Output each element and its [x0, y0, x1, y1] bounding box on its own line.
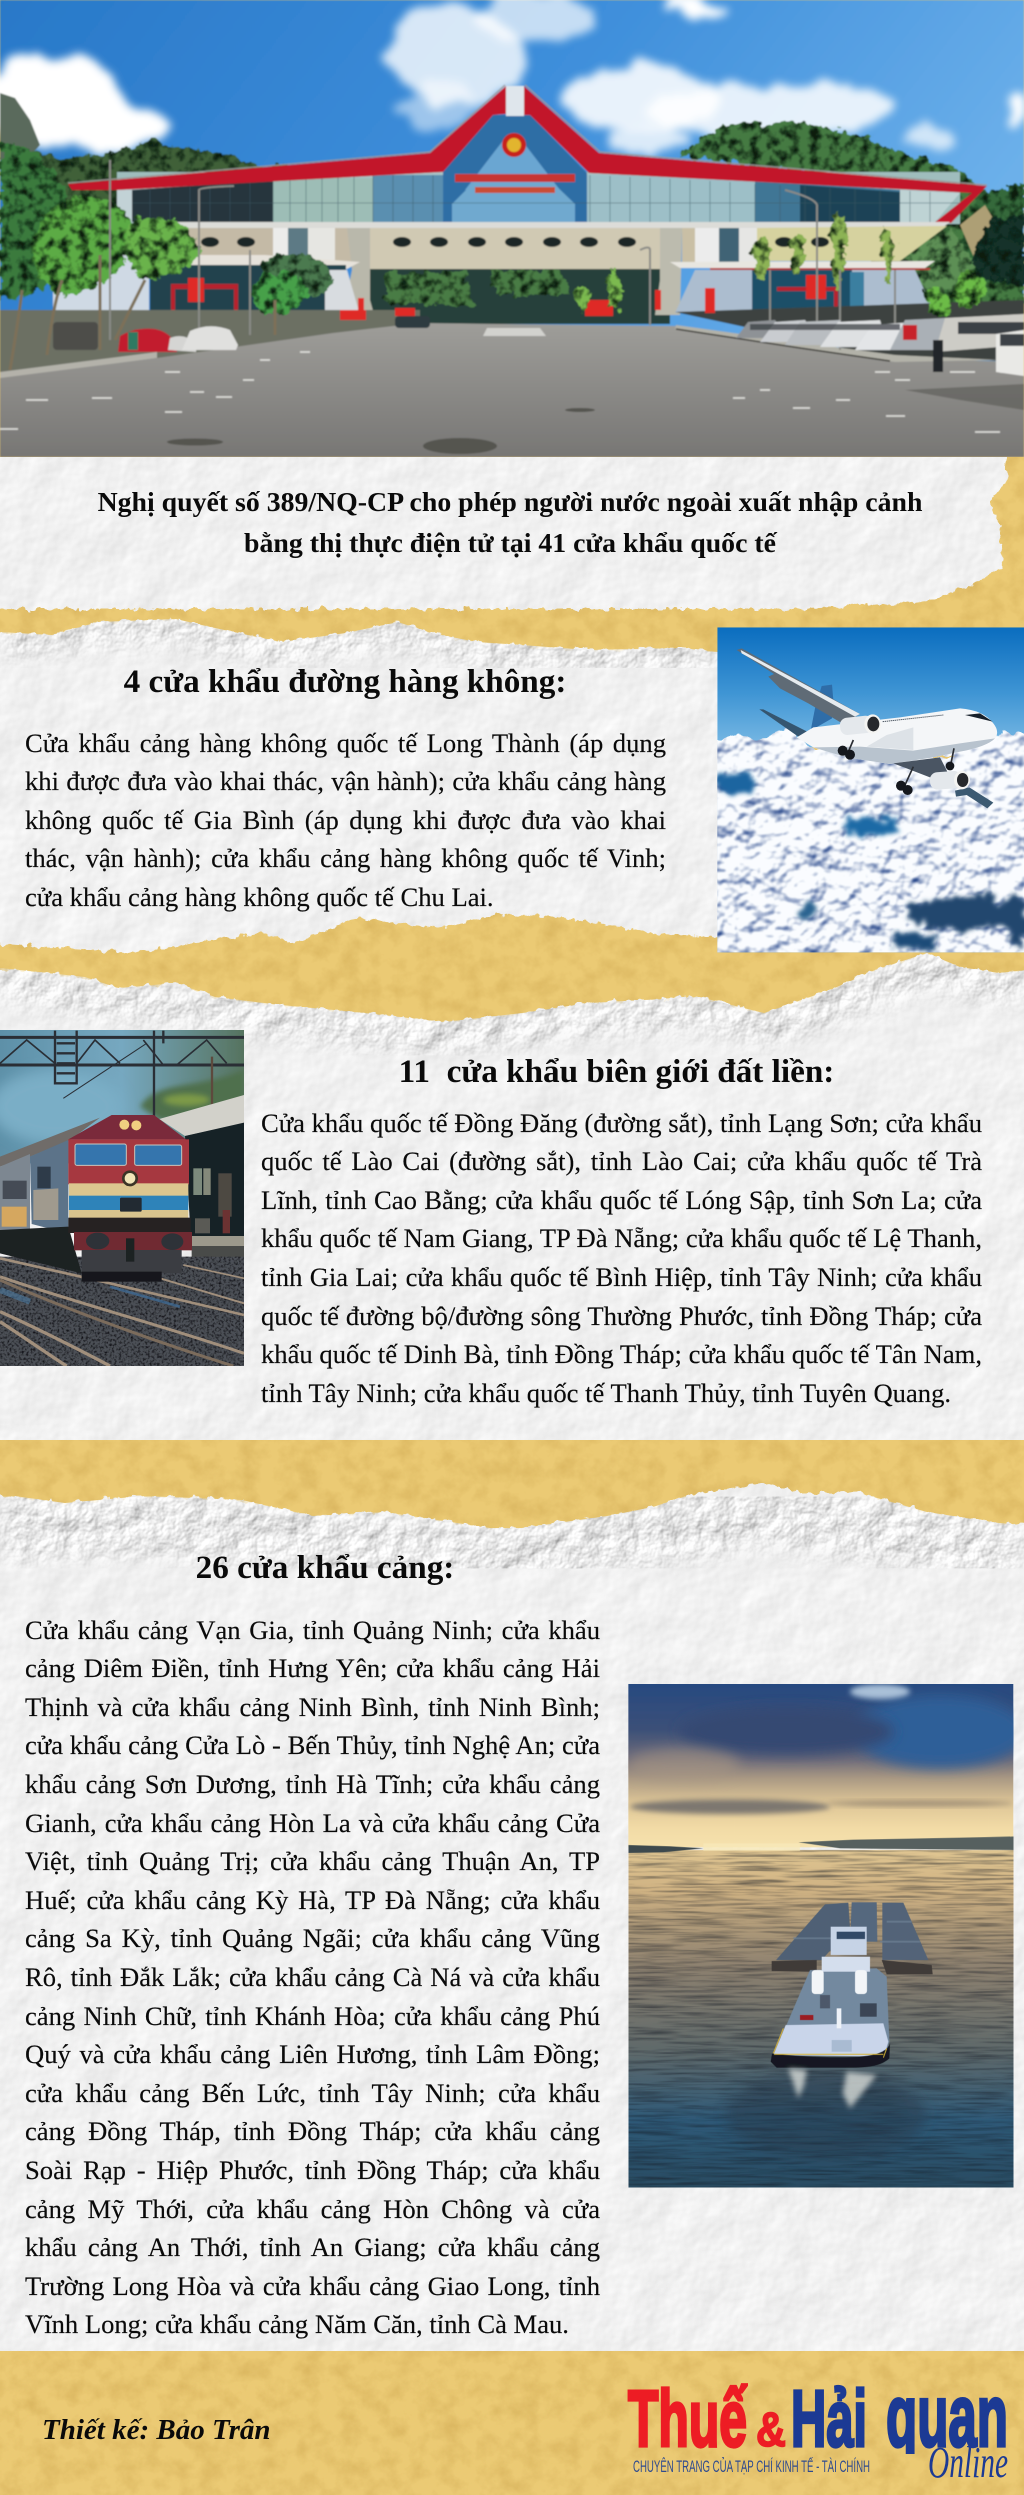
- title text: [98, 486, 922, 558]
- body text: port gates: cảng Ninh Chữ, tỉnh Khánh Hòa; cửa khẩu cảng Phú: [25, 2001, 600, 2031]
- logo: Thuế & Hải quan Online: [628, 2374, 1008, 2487]
- body text: air gates: cửa khẩu cảng hàng không quốc tế Chu Lai.: [25, 882, 494, 912]
- body text: port gates: khẩu cảng Sơn Dương, tỉnh Hà Tĩnh; cửa khẩu cảng: [25, 1769, 600, 1799]
- title text: Nghị quyết số 389/NQ-CP cho phép người nước ngoài xuất nhập cảnh: [98, 486, 922, 518]
- torn paper sheet: [0, 1484, 1024, 2370]
- logo: Thuế & Hải quan Online: Hải: [791, 2374, 867, 2463]
- tug: [773, 1968, 889, 2057]
- designer credit: Thiết kế: Bảo Trân: [42, 2414, 271, 2446]
- plane: [737, 648, 997, 808]
- body text: air gates: khi được đưa vào khai thác, vận hành); cửa khẩu cảng hàng: [25, 766, 666, 796]
- torn paper sheet: [0, 619, 730, 953]
- body text: port gates: cảng Mỹ Thới, cửa khẩu cảng Hòn Chông và cửa: [25, 2194, 600, 2224]
- body text: land gates: tỉnh Gia Lai; cửa khẩu quốc tế Bình Hiệp, tỉnh Tây Ninh; cửa khẩu: [261, 1262, 982, 1292]
- wake: [788, 2068, 877, 2108]
- torn paper sheet: [0, 953, 1024, 1460]
- body text: port gates: cửa khẩu cảng Bến Lức, tỉnh Tây Ninh; cửa khẩu: [25, 2078, 600, 2108]
- logo: Thuế & Hải quan Online: Thuế: [628, 2374, 747, 2463]
- photo: barge at sunset: [628, 1684, 1014, 2188]
- body text: land gates: tỉnh Tây Ninh; cửa khẩu quốc tế Thanh Thủy, tỉnh Tuyên Quang.: [261, 1378, 951, 1408]
- body text: port gates: cảng Sa Kỳ, tỉnh Quảng Ngãi; cửa khẩu cảng Vũng: [25, 1923, 600, 1953]
- body text: air gates: không quốc tế Gia Bình (áp dụng khi được đưa vào khai: [25, 805, 666, 835]
- hills: [0, 93, 1024, 310]
- heading: air gates: 4 cửa khẩu đường hàng không:: [124, 663, 566, 700]
- parked cars right: [736, 314, 1024, 376]
- building body: [53, 85, 987, 325]
- emblem: [502, 133, 526, 157]
- barges: [776, 1903, 850, 1960]
- photo: train: [0, 1030, 244, 1366]
- ground: [0, 1257, 244, 1366]
- slab and ceiling: [153, 222, 950, 228]
- back trees through gate: [370, 262, 670, 324]
- footer band: [42, 2374, 1008, 2487]
- torn paper sheet: [0, 445, 1007, 609]
- body text: land gates: Cửa khẩu quốc tế Đồng Đăng (đường sắt), tỉnh Lạng Sơn; cửa khẩu: [261, 1108, 982, 1138]
- body text: port gates: Vĩnh Long; cửa khẩu cảng Năm Căn, tỉnh Cà Mau.: [25, 2309, 569, 2339]
- right wing lower storey: [675, 270, 935, 313]
- body text: air gates: Cửa khẩu cảng hàng không quốc tế Long Thành (áp dụng: [25, 728, 666, 758]
- panel: sea port gates: [0, 1483, 1024, 2351]
- body text: port gates: Trường Long Hòa và cửa khẩu cảng Giao Long, tỉnh: [25, 2271, 600, 2301]
- panel: land border gates: [0, 953, 1024, 1440]
- body text: land gates: quốc tế đường bộ/đường sông Thường Phước, tỉnh Đồng Tháp; cửa: [261, 1301, 982, 1331]
- body text: land gates: quốc tế Lào Cai (đường sắt), tỉnh Lào Cai; cửa khẩu quốc tế Trà: [261, 1146, 982, 1176]
- body text: port gates: cửa khẩu cảng Cửa Lò - Bến Thủy, tỉnh Nghệ An; cửa: [25, 1730, 600, 1760]
- panel: air border gates: [0, 618, 1024, 954]
- heading: port gates: 26 cửa khẩu cảng:: [196, 1548, 454, 1586]
- logo: Thuế & Hải quan Online: &: [756, 2404, 786, 2457]
- locomotive: [68, 1115, 186, 1139]
- train cars: [0, 1118, 100, 1167]
- station: [159, 1095, 244, 1136]
- body text: air gates: [25, 728, 666, 912]
- body text: land gates: khẩu quốc tế Dinh Bà, tỉnh Đồng Tháp; cửa khẩu quốc tế Tân Nam,: [261, 1339, 982, 1369]
- photo: airplane above clouds: [717, 627, 1024, 952]
- road and ground: [0, 310, 420, 380]
- body text: port gates: Gianh, cửa khẩu cảng Hòn La và cửa khẩu cảng Cửa: [25, 1808, 600, 1838]
- left wing lower storey: [185, 255, 360, 270]
- body text: port gates: Quý và cửa khẩu cảng Liên Hương, tỉnh Lâm Đồng;: [25, 2039, 600, 2069]
- hero photo: border gate building: [0, 0, 1024, 457]
- body text: port gates: Việt, tỉnh Quảng Trị; cửa khẩu cảng Thuận An, TP: [25, 1846, 600, 1876]
- body text: land gates: [261, 1108, 982, 1408]
- body text: land gates: Lĩnh, tỉnh Cao Bằng; cửa khẩu quốc tế Lóng Sập, tỉnh Sơn La; cửa: [261, 1185, 982, 1215]
- body text: port gates: khẩu cảng An Thới, tỉnh An Giang; cửa khẩu cảng: [25, 2232, 600, 2262]
- body text: port gates: cảng Đồng Tháp, tỉnh Đồng Tháp; cửa khẩu cảng: [25, 2116, 600, 2146]
- body text: port gates: Soài Rạp - Hiệp Phước, tỉnh Đồng Tháp; cửa khẩu: [25, 2155, 600, 2185]
- body text: land gates: khẩu quốc tế Nam Giang, TP Đà Nẵng; cửa khẩu quốc tế Lệ Thanh,: [261, 1223, 982, 1253]
- dark gaps in clouds: [715, 773, 1024, 950]
- body text: air gates: thác, vận hành); cửa khẩu cảng hàng không quốc tế Vinh;: [25, 843, 666, 873]
- red roof: [68, 86, 506, 190]
- heading: land gates: 11 cửa khẩu biên giới đất liền:: [399, 1053, 834, 1090]
- title text: bằng thị thực điện tử tại 41 cửa khẩu quốc tế: [244, 528, 776, 558]
- wake swirl: [727, 2072, 927, 2158]
- body text: port gates: Rô, tỉnh Đắk Lắk; cửa khẩu cảng Cà Ná và cửa khẩu: [25, 1962, 600, 1992]
- body text: port gates: cảng Diêm Điền, tỉnh Hưng Yên; cửa khẩu cảng Hải: [25, 1653, 600, 1683]
- trees: [0, 140, 985, 315]
- gantry: [0, 1030, 244, 1116]
- body text: port gates: Cửa khẩu cảng Vạn Gia, tỉnh Quảng Ninh; cửa khẩu: [25, 1615, 600, 1645]
- body text: port gates: [25, 1615, 600, 2339]
- panel: title on torn paper: [0, 457, 1008, 612]
- parked cars left: [53, 322, 98, 350]
- body text: port gates: Huế; cửa khẩu cảng Kỳ Hà, TP Đà Nẵng; cửa khẩu: [25, 1885, 600, 1915]
- center vehicles and flags: [395, 316, 430, 328]
- body text: port gates: Thịnh và cửa khẩu cảng Ninh Bình, tỉnh Ninh Bình;: [25, 1692, 600, 1722]
